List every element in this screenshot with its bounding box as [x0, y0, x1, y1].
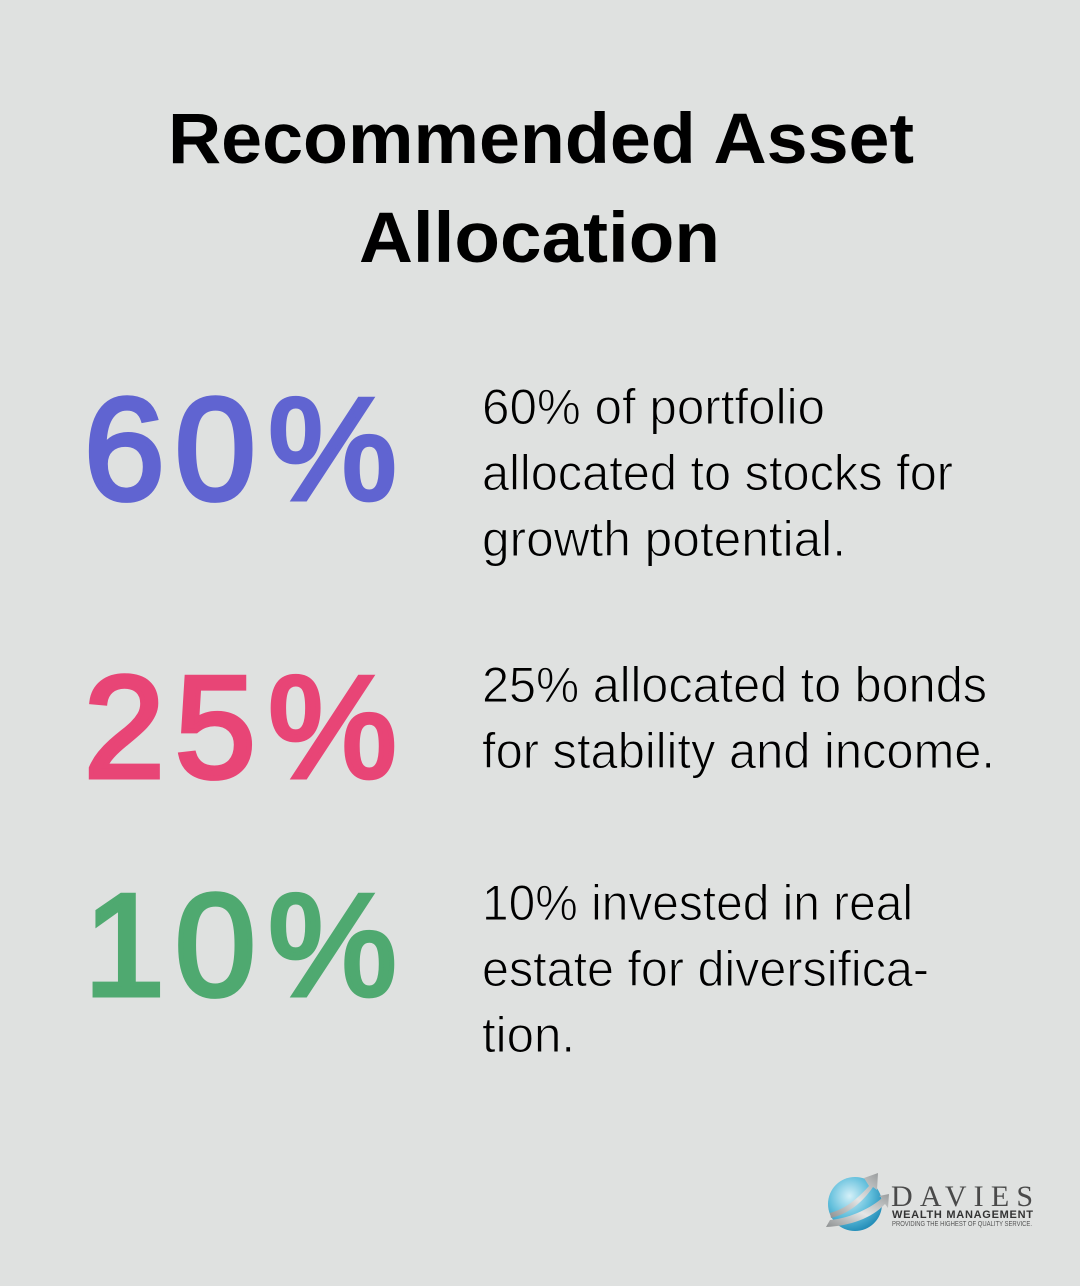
logo: Davies Wealth Management — [826, 1173, 1033, 1231]
number: 60%: 60% — [84, 368, 397, 530]
title — [168, 100, 914, 278]
text: 60% description: allocated to stocks for — [482, 445, 953, 501]
icon: globe with arrows — [826, 1173, 889, 1231]
text: 10% description: tion. — [482, 1007, 575, 1063]
text: 25% description: 25% allocated to bonds — [482, 657, 987, 713]
text: 25% description — [482, 657, 995, 779]
wordmark: WEALTH MANAGEMENT — [892, 1209, 1033, 1221]
text: 10% description: 10% invested in real — [482, 875, 913, 931]
text: 25% description: for stability and income. — [482, 723, 995, 779]
title: Recommended Asset — [168, 100, 914, 179]
text: 60% description: 60% of portfolio — [482, 379, 825, 435]
stat: 25% bonds — [84, 646, 995, 808]
text: 60% description: growth potential. — [482, 511, 846, 567]
text: 60% description — [482, 379, 953, 567]
title: Allocation — [359, 199, 720, 278]
wordmark: DAVIES — [891, 1180, 1033, 1213]
number: 10%: 10% — [84, 864, 397, 1026]
wordmark: PROVIDING THE HIGHEST OF QUALITY SERVICE. — [892, 1221, 1032, 1228]
number: 25%: 25% — [84, 646, 397, 808]
stat: 10% real estate — [84, 864, 929, 1063]
text: 10% description: estate for diversifica- — [482, 941, 929, 997]
stat: 60% stocks — [84, 368, 953, 567]
wordmark — [891, 1180, 1033, 1228]
text: 10% description — [482, 875, 929, 1063]
